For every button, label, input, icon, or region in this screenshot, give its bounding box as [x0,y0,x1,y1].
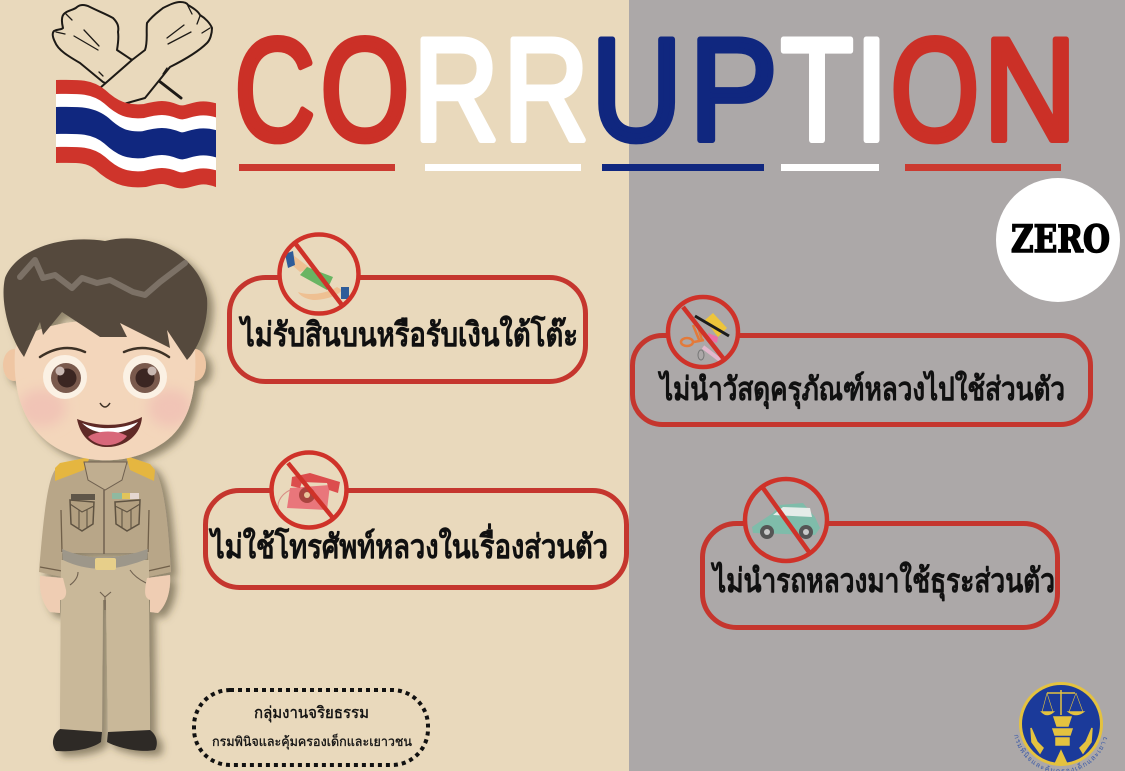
uniform shirt and arms [39,464,171,577]
callout outline [230,278,586,382]
title: CORRUPTION: C [234,8,315,171]
title underlines [239,164,1061,171]
logo scales [1031,690,1092,764]
credit box [194,690,428,765]
eyes [43,355,167,399]
hair [4,238,207,360]
panel: no private use of supplies [632,297,1090,424]
credit heading: กลุ่มงานจริยธรรม [254,705,369,723]
callout outline [702,524,1058,628]
credit subheading: กรมพินิจและคุ้มครองเด็กและเยาวชน [212,732,412,750]
title: CORRUPTION: I [855,9,888,172]
title: CORRUPTION: P [689,8,778,171]
title: CORRUPTION: N [983,9,1077,172]
character: smiling civil servant [3,238,207,751]
text: no bribes: ไม่รับสินบนหรือรับเงินใต้โต๊ะ [239,316,578,353]
title: CORRUPTION: O [320,8,409,171]
icon: prohibited office supplies [668,297,738,367]
icon: Thai flag [50,88,222,181]
mouth [77,417,142,447]
epaulettes [55,456,155,481]
title: CORRUPTION: R [413,9,499,172]
title: CORRUPTION: R [503,9,589,172]
trousers [60,560,150,733]
hands [40,575,170,613]
icon: crossed fists [53,2,212,105]
icon: prohibited telephone [271,452,347,528]
icon: prohibited bribe money [279,234,359,314]
title: CORRUPTION: O [890,8,979,171]
title: CORRUPTION: T [781,9,853,172]
trouser details [70,570,146,610]
panel: no private use of vehicles [702,479,1058,628]
callout outline [632,336,1090,424]
cheeks [18,389,192,427]
title: CORRUPTION [234,7,1077,172]
text: no private phone use: ไม่ใช้โทรศัพท์หลวงในเรื่องส่วนตัว [209,524,608,565]
face [15,320,195,460]
icon: crossed fists over Thai flag [50,2,222,181]
ears [3,349,206,381]
collar [84,462,127,490]
eyebrows [40,348,169,357]
shoes [53,729,157,751]
panel: no bribes [230,234,586,382]
logo ring text: กรมพินิจและคุ้มครองเด็กและเยาวชน [1014,734,1108,771]
dotted border [194,690,428,765]
badge: ZERO [996,178,1120,302]
icon: prohibited car [745,479,827,561]
title: CORRUPTION: U [591,7,682,171]
callout outline [206,490,626,588]
panel: no private phone use [206,452,626,588]
hair highlight [20,260,185,295]
belt [62,549,148,570]
nose [100,403,110,407]
